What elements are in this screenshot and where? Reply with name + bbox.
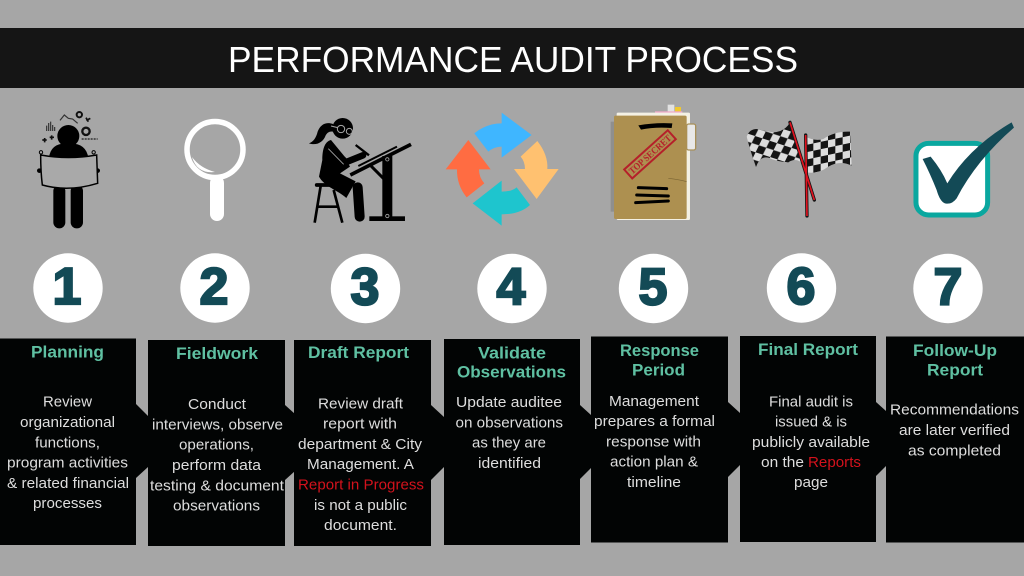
number 3 badge: 3	[351, 258, 379, 316]
text: fieldwork description	[150, 396, 285, 515]
icon: crossed checkered flags	[746, 120, 852, 218]
text: response period description: action plan &	[610, 454, 698, 471]
text: final report description: issued & is	[775, 414, 847, 431]
text: response period description: response with	[606, 433, 701, 450]
heading: follow-up report: Report	[927, 362, 984, 380]
text: planning description: program activities	[7, 454, 128, 472]
panel: planning	[0, 338, 148, 545]
heading: draft report: Draft Report	[308, 344, 410, 362]
text: validate observations description	[456, 394, 563, 472]
text: planning description	[7, 394, 129, 512]
title: PERFORMANCE AUDIT PROCESS	[228, 39, 798, 80]
panel: final report	[740, 336, 886, 542]
text: follow-up report description: Recommendations	[890, 402, 1019, 419]
text: fieldwork description: testing & document	[150, 477, 285, 494]
number 3 badge	[331, 254, 400, 323]
text: draft report description: Report in Progress	[298, 476, 424, 494]
text: draft report description: Review draft	[318, 395, 404, 412]
icon: top secret folder	[611, 105, 696, 220]
icon: top secret folder: TOP SECRET	[627, 133, 674, 177]
text: validate observations description: identified	[478, 455, 541, 472]
text: fieldwork description: interviews, observe	[152, 416, 283, 433]
number 2 badge	[180, 253, 250, 323]
number 6 badge: 6	[787, 258, 815, 316]
number 5 badge	[619, 254, 688, 323]
number 2 badge: 2	[200, 258, 228, 316]
panel: validate observations	[444, 339, 591, 545]
text: draft report description: department & City	[298, 436, 423, 453]
icon: magnifying glass	[187, 122, 243, 221]
text: response period description	[594, 393, 715, 491]
text: fieldwork description: observations	[173, 498, 260, 515]
text: final report description: Reports	[808, 454, 861, 471]
text: planning description: & related financial	[7, 475, 129, 492]
text: draft report description	[298, 395, 424, 534]
heading: fieldwork: Fieldwork	[176, 345, 259, 363]
heading: final report: Final Report	[758, 341, 859, 359]
heading: validate observations	[457, 344, 566, 382]
number 4 badge: 4	[497, 258, 526, 316]
number 4 badge	[477, 254, 547, 323]
text: fieldwork description: Conduct	[188, 396, 247, 413]
title banner	[0, 28, 1024, 88]
text: final report description: publicly available	[752, 434, 870, 451]
number 1 badge	[33, 253, 103, 323]
text: response period description: timeline	[627, 474, 681, 491]
text: planning description: functions,	[35, 434, 100, 451]
number 5 badge: 5	[639, 258, 667, 316]
text: draft report description: Management. A	[307, 456, 414, 473]
text: final report description: page	[794, 474, 828, 491]
text: draft report description: report with	[323, 416, 397, 433]
number 1 badge: 1	[53, 258, 81, 316]
number 7 badge: 7	[934, 258, 962, 316]
text: draft report description: document.	[324, 517, 397, 534]
text: planning description: Review	[43, 394, 92, 411]
text: follow-up report description	[890, 402, 1019, 459]
icon: person reading a map	[37, 112, 100, 228]
icon: person drafting at a table	[309, 118, 411, 223]
text: draft report description: is not a public	[314, 497, 407, 514]
heading: planning: Planning	[31, 343, 104, 361]
number 7 badge	[913, 254, 983, 323]
text: validate observations description: Update auditee	[456, 394, 562, 411]
panel: response period	[591, 336, 740, 542]
heading: follow-up report: Follow-Up	[913, 342, 997, 360]
text: follow-up report description: are later verified	[899, 422, 1010, 439]
heading: validate observations: Validate	[478, 344, 546, 362]
heading: follow-up report	[913, 342, 997, 380]
text: final report description	[752, 393, 870, 491]
text: validate observations description: on observations	[456, 414, 563, 431]
text: fieldwork description: perform data	[172, 457, 262, 474]
text: fieldwork description: operations,	[179, 437, 254, 454]
text: planning description: processes	[33, 495, 102, 512]
text: response period description: Management	[609, 393, 700, 410]
text: planning description: organizational	[20, 414, 115, 431]
panel: follow-up report	[886, 336, 1024, 542]
heading: validate observations: Observations	[457, 364, 566, 382]
number 6 badge	[767, 253, 836, 323]
text: response period description: prepares a formal	[594, 413, 715, 430]
heading: response period: Period	[632, 361, 685, 379]
icon: four circular arrows	[446, 113, 559, 226]
text: validate observations description: as they are	[472, 435, 546, 452]
heading: response period: Response	[620, 342, 699, 360]
text: final report description: Final audit is	[769, 393, 853, 410]
heading: response period	[620, 342, 699, 379]
panel: draft report	[294, 340, 444, 546]
panel: fieldwork	[148, 340, 295, 546]
text: follow-up report description: as completed	[908, 442, 1001, 459]
icon: check mark in a box	[916, 122, 1014, 215]
text: final report description: on the	[761, 454, 804, 471]
